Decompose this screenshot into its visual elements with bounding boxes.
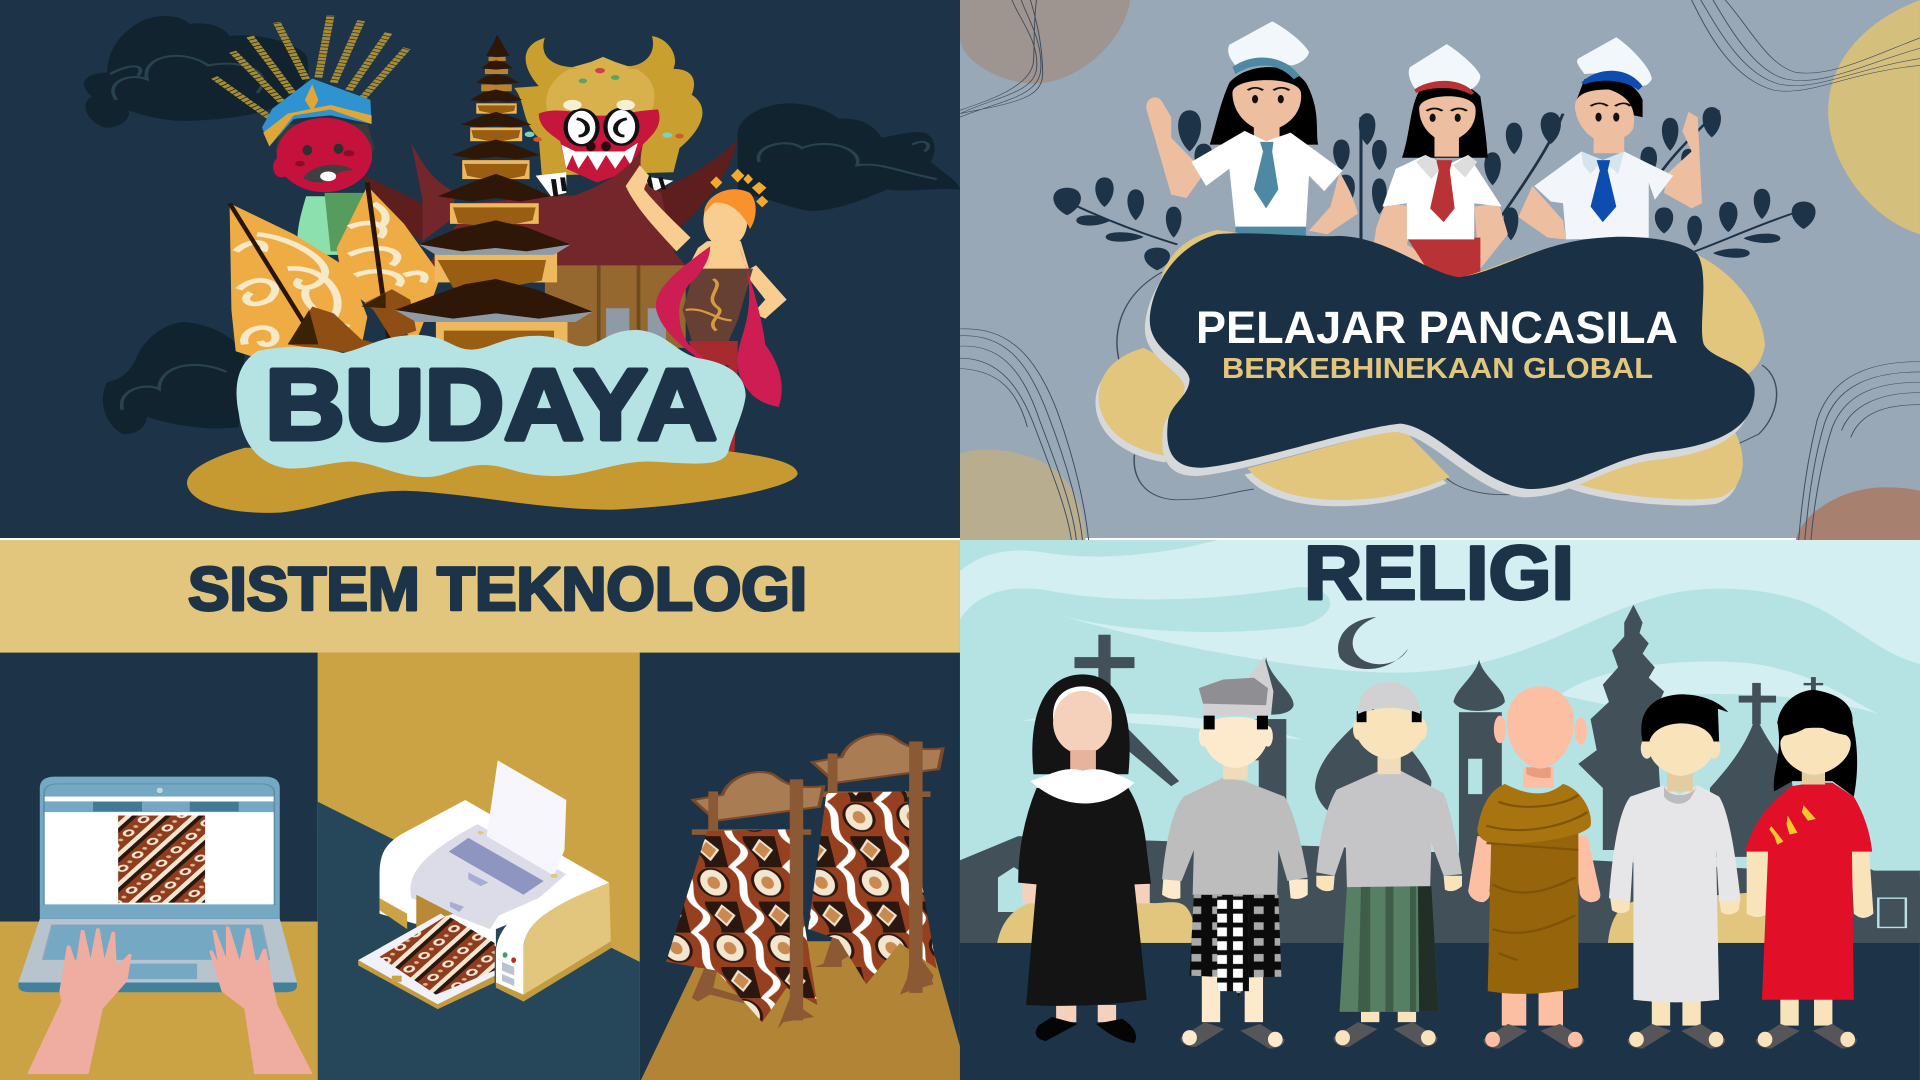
- corner shapes: [960, 0, 1920, 540]
- front stand: [666, 772, 823, 1029]
- yellow blobs: [1099, 230, 1765, 500]
- panel: pelajar pancasila: [960, 0, 1920, 540]
- student middle: [1373, 44, 1508, 279]
- minangkabau house: [361, 139, 738, 350]
- main navy blob: [1145, 233, 1755, 497]
- figure: man in white robe: [1609, 694, 1741, 1049]
- puppet figure: [214, 15, 407, 255]
- figure: balinese man: [1162, 657, 1308, 1049]
- gunungan batik wings: [230, 183, 441, 358]
- batik stands panel: [640, 653, 960, 1080]
- figure: nun: [1018, 674, 1151, 1043]
- panel: budaya: [0, 0, 960, 538]
- back stand: [811, 734, 943, 984]
- bushes: [997, 891, 1768, 946]
- figure: girl in red dress: [1745, 677, 1873, 1049]
- printer panel: [318, 653, 640, 1080]
- subtitle: Berkebhinekaan Global: BERKEBHINEKAAN GLOBAL: [1222, 353, 1653, 385]
- line bundles: [960, 0, 1920, 540]
- figure: buddhist monk: [1468, 686, 1600, 1049]
- title blob: [237, 330, 746, 477]
- figure: muslim man: [1316, 682, 1462, 1047]
- dancer: [626, 165, 787, 451]
- front roof: [545, 145, 676, 265]
- pagoda: [395, 34, 593, 350]
- student right: [1518, 37, 1702, 239]
- laptop panel: [0, 653, 318, 1080]
- panel: sistem teknologi: [0, 540, 960, 1080]
- title: BUDAYA: BUDAYA: [265, 349, 717, 461]
- title: Pelajar Pancasila: PELAJAR PANCASILA: [1196, 302, 1678, 353]
- barong mask: [514, 36, 702, 196]
- title: Sistem Teknologi: SISTEM TEKNOLOGI: [188, 555, 807, 623]
- ground: [960, 943, 1920, 1080]
- header band: [0, 540, 960, 653]
- title: Religi: RELIGI: [1304, 531, 1574, 616]
- leaves: [1053, 107, 1816, 270]
- blob shadows: [1095, 354, 1740, 506]
- clouds: [84, 16, 960, 434]
- ground blob: [187, 448, 798, 513]
- silhouette skyline: [960, 605, 1920, 943]
- sky waves: [960, 540, 1920, 740]
- hands: [29, 927, 310, 1073]
- student left: [1146, 21, 1358, 238]
- panel: religi: [960, 531, 1920, 1080]
